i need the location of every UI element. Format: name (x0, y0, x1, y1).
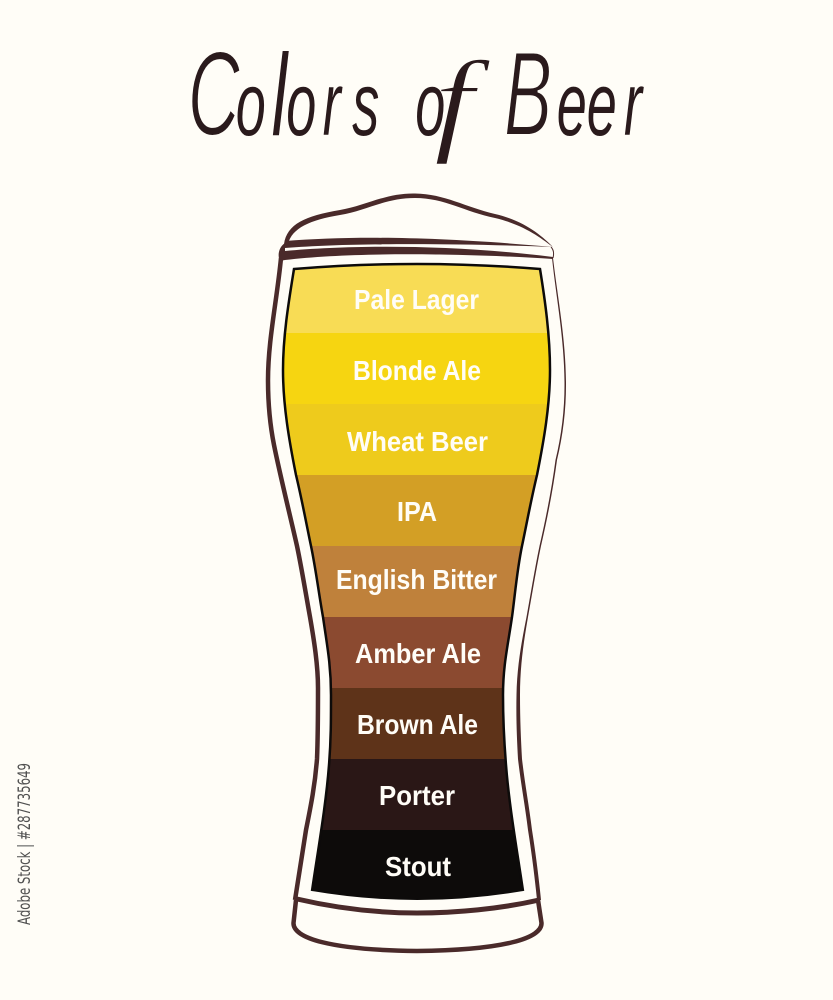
rim lower band (279, 243, 553, 261)
title: e (557, 54, 587, 154)
title: l (272, 31, 289, 160)
labels: Wheat Beer (347, 426, 488, 457)
liquid colour bands (284, 265, 549, 900)
title: o (236, 54, 266, 154)
labels: Porter (379, 780, 455, 811)
labels: Blonde Ale (353, 355, 481, 386)
labels: Amber Ale (355, 638, 481, 669)
liquid outline (283, 264, 550, 891)
labels: English Bitter (336, 564, 497, 595)
beer glass (268, 193, 570, 951)
labels: Brown Ale (357, 709, 478, 740)
rim right edge (551, 247, 554, 258)
glass base inner band (297, 899, 539, 913)
title: s (352, 54, 379, 154)
title: e (587, 54, 617, 154)
foam outline (284, 193, 553, 247)
labels: Stout (385, 851, 451, 882)
labels: Pale Lager (354, 284, 479, 315)
glass left wall (268, 258, 318, 900)
glass right wall (516, 258, 566, 900)
title: o (415, 54, 445, 154)
title: f (434, 38, 491, 166)
title: B (504, 26, 552, 160)
labels (336, 284, 497, 882)
glass base (293, 900, 542, 951)
title: r (323, 54, 343, 154)
title: o (286, 54, 316, 154)
title: r (624, 54, 644, 154)
labels: IPA (397, 496, 437, 527)
rim upper band (285, 238, 553, 248)
title: C (188, 26, 240, 160)
side credit text: Adobe Stock | #287735649 (15, 763, 35, 925)
title (188, 26, 644, 166)
